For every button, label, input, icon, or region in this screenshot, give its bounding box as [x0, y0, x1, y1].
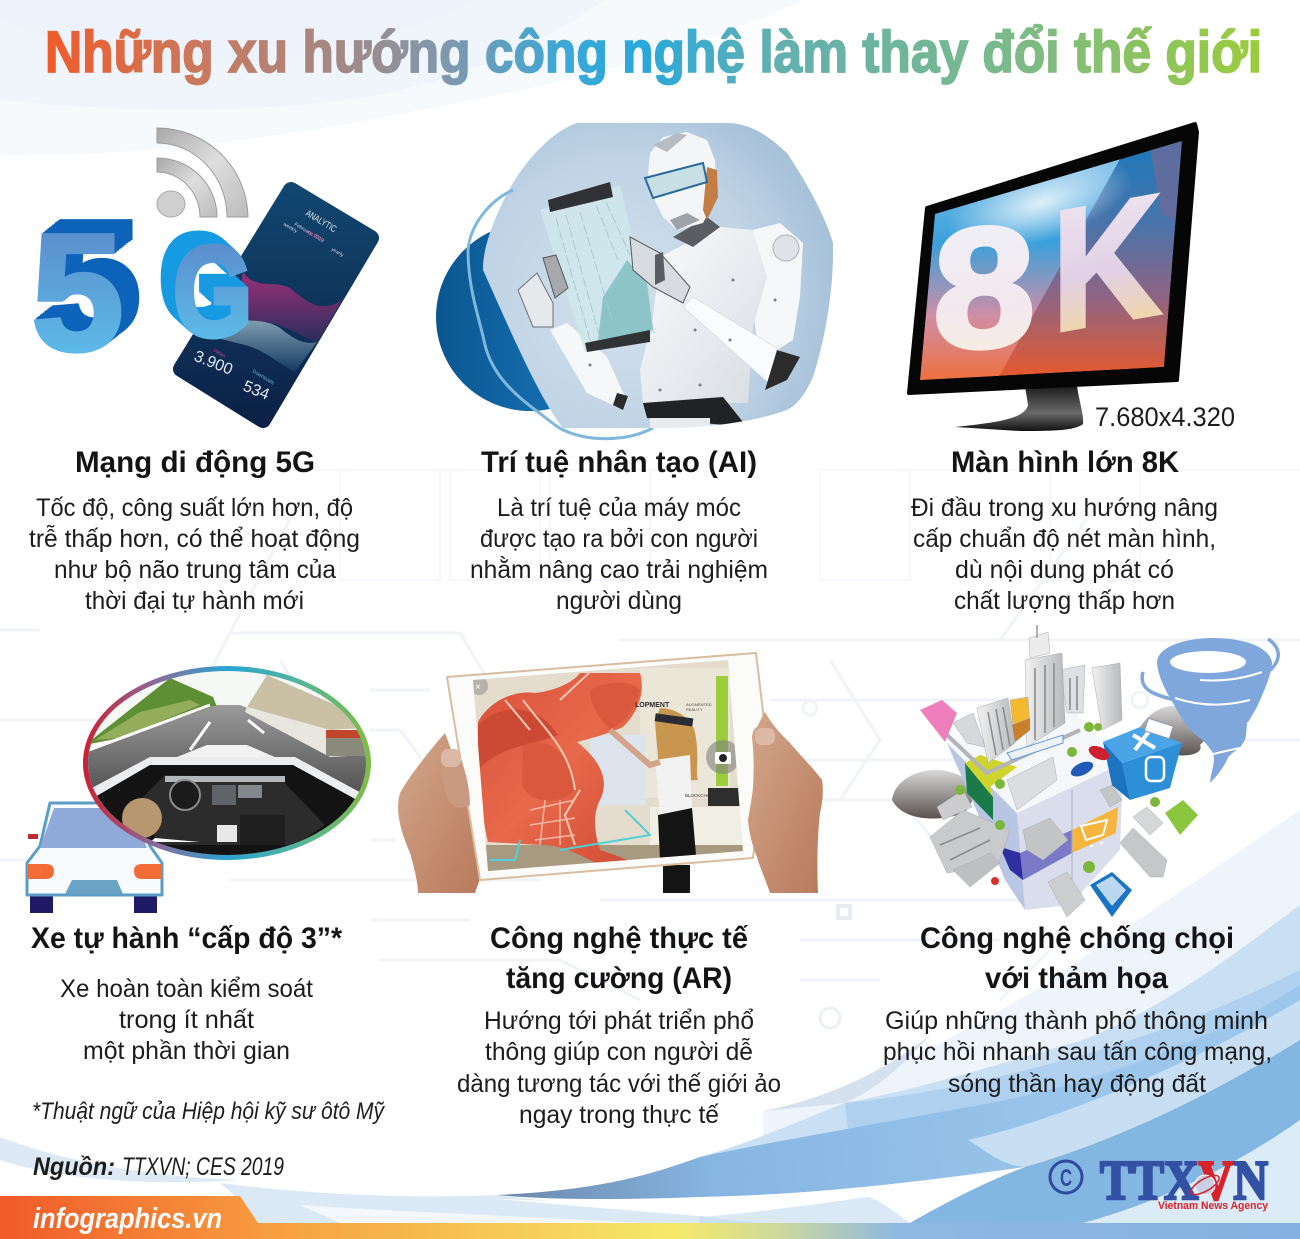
orange tab: infographics.vn: infographics.vn	[33, 1203, 222, 1235]
orange tab: infographics.vn	[0, 1196, 258, 1239]
black stand	[663, 865, 690, 893]
text block: disaster: sóng thần hay động đất	[948, 1070, 1206, 1098]
text block: 5G: trễ thấp hơn, có thể hoạt động	[29, 524, 360, 553]
panel: AR tablet	[398, 653, 823, 893]
text block: self-driving car: một phần thời gian	[83, 1037, 290, 1065]
text block: disaster	[883, 1007, 1272, 1098]
logo: TTXVN: TTXVN	[1100, 1150, 1268, 1212]
tablet screen: REALITY	[686, 707, 703, 712]
cube faces	[947, 707, 1123, 910]
text block: 8K: dù nội dung phát có	[955, 556, 1174, 584]
text block: 8K: cấp chuẩn độ nét màn hình,	[913, 525, 1216, 553]
source	[33, 1153, 284, 1181]
heading: AI: Trí tuệ nhân tạo (AI)	[481, 446, 757, 479]
numeral 5: 5	[31, 200, 124, 386]
logo: TTXVN: Vietnam News Agency	[1158, 1200, 1269, 1212]
icon: smartphone with analytics: weekly	[282, 222, 299, 235]
text block: 5G: thời đại tự hành mới	[85, 587, 304, 615]
heading: disaster: với thảm họa	[985, 962, 1168, 995]
heading: 8K: Màn hình lớn 8K	[951, 446, 1179, 479]
window stripes	[940, 663, 1077, 860]
background: bottom right pale band	[763, 810, 1300, 1223]
heading: disaster: Công nghệ chống chọi	[920, 922, 1234, 955]
resolution label: 7.680x4.320	[1095, 402, 1235, 432]
text block: AR: ngay trong thực tế	[519, 1101, 719, 1129]
icon: smartphone with analytics	[181, 190, 371, 420]
text block: AI: được tạo ra bởi con người	[480, 525, 758, 553]
text block: 8K	[911, 494, 1218, 615]
heading: AR: Công nghệ thực tế	[490, 922, 748, 955]
text block: self-driving car: Xe hoàn toàn kiểm soát	[60, 975, 313, 1003]
background: circuit pattern	[0, 470, 1300, 1028]
background: bottom blue swoosh	[490, 905, 1300, 1223]
pink cube	[920, 700, 957, 742]
train	[1007, 735, 1063, 760]
icon: smartphone with analytics: 3.900	[192, 348, 235, 379]
text block: AI	[470, 494, 768, 615]
icon: smartphone with analytics: ANALYTIC	[303, 208, 338, 235]
tablet screen: BLOCKCHAIN	[685, 793, 714, 798]
ambulance	[1144, 718, 1173, 739]
icon: smartphone with analytics: Downloads	[251, 369, 276, 387]
hexagonal backdrop	[483, 123, 833, 428]
city cube	[920, 625, 1198, 917]
text block: AI: nhằm nâng cao trải nghiệm	[470, 555, 768, 584]
source: TTXVN; CES 2019	[122, 1153, 284, 1181]
8K numeral: 8	[933, 190, 1035, 385]
icon: smartphone with analytics: monthly	[305, 229, 323, 243]
panel: AI robot	[436, 123, 833, 439]
outline ring	[468, 190, 653, 439]
text block: AR	[457, 1007, 781, 1129]
text block: AR: dàng tương tác với thế giới ảo	[457, 1070, 781, 1098]
text block: disaster: Giúp những thành phố thông minh	[885, 1007, 1268, 1035]
robot	[550, 132, 803, 428]
panel: 5G	[31, 128, 371, 420]
heading: AR: tăng cường (AR)	[506, 962, 732, 995]
panel: 8K monitor	[909, 124, 1235, 432]
blue transport cube	[1103, 727, 1182, 800]
text block: AR: Hướng tới phát triển phổ	[484, 1007, 754, 1035]
screen	[920, 139, 1182, 385]
heading: self-driving car: Xe tự hành “cấp độ 3”*	[31, 922, 342, 955]
background: top swooshes	[0, 0, 804, 155]
text block: self-driving car: trong ít nhất	[119, 1006, 254, 1034]
holographic tablet	[540, 182, 655, 352]
QR cube	[1090, 872, 1132, 917]
footnote: *Thuật ngữ của Hiệp hội kỹ sư ôtô Mỹ	[32, 1098, 386, 1125]
letter G: G	[173, 220, 253, 364]
panel: self-driving car	[27, 660, 380, 913]
icon: clouds	[892, 706, 1210, 819]
skyscrapers	[930, 625, 1167, 917]
text block: 5G	[29, 494, 360, 615]
green cloud cube	[1165, 800, 1198, 835]
icon: smartphone with analytics: 534	[241, 378, 272, 404]
text block: AI: người dùng	[556, 587, 682, 615]
photo: driver view	[83, 666, 371, 860]
text block: 8K: chất lượng thấp hơn	[954, 587, 1175, 615]
monitor frame	[909, 124, 1197, 393]
left palm	[398, 733, 482, 893]
text block: disaster: phục hồi nhanh sau tấn công mạng,	[883, 1038, 1272, 1066]
panel: disaster resilient city	[892, 625, 1278, 917]
no-entry sign	[991, 877, 999, 885]
tablet body	[447, 653, 767, 880]
icon: tornado	[1142, 638, 1278, 783]
text block: 5G: Tốc độ, công suất lớn hơn, độ	[36, 494, 353, 522]
bottom gradient bar	[0, 1223, 1300, 1239]
tablet screen: ×	[475, 682, 481, 693]
tablet screen	[470, 655, 750, 875]
icon: smartphone with analytics: Views	[212, 348, 227, 360]
icon: smartphone with analytics: February, 2019	[293, 222, 325, 244]
background: bottom left swooshes	[0, 1137, 780, 1223]
left thumb	[440, 750, 470, 808]
tablet screen: AUGMENTED	[686, 702, 712, 707]
text block: AI: Là trí tuệ của máy móc	[497, 494, 741, 522]
heading: disaster	[920, 922, 1234, 995]
text block: 8K: Đi đầu trong xu hướng nâng	[911, 494, 1218, 522]
text block: AR: thông giúp con người dễ	[485, 1037, 753, 1066]
icon: smartphone with analytics: yearly	[330, 247, 345, 259]
icon: car front	[27, 803, 162, 913]
robot hands	[518, 237, 690, 327]
logo: TTXVN: C	[1060, 1165, 1072, 1192]
source: Nguồn:	[33, 1153, 115, 1181]
right hand	[748, 712, 823, 893]
8K letter: K	[1052, 157, 1161, 369]
robot rivets	[588, 278, 776, 392]
cars	[1069, 758, 1095, 780]
heading: AR	[490, 922, 748, 995]
heading: 5G: Mạng di động 5G	[75, 446, 315, 479]
thumb nails	[441, 728, 775, 767]
text block: 5G: như bộ não trung tâm của	[54, 556, 336, 584]
monitor stand	[955, 386, 1083, 431]
tablet screen: LOPMENT	[635, 702, 670, 709]
icon: wifi signal	[157, 128, 248, 217]
blue disc	[436, 223, 624, 411]
text block: self-driving car	[60, 975, 313, 1065]
trees	[955, 722, 1160, 873]
